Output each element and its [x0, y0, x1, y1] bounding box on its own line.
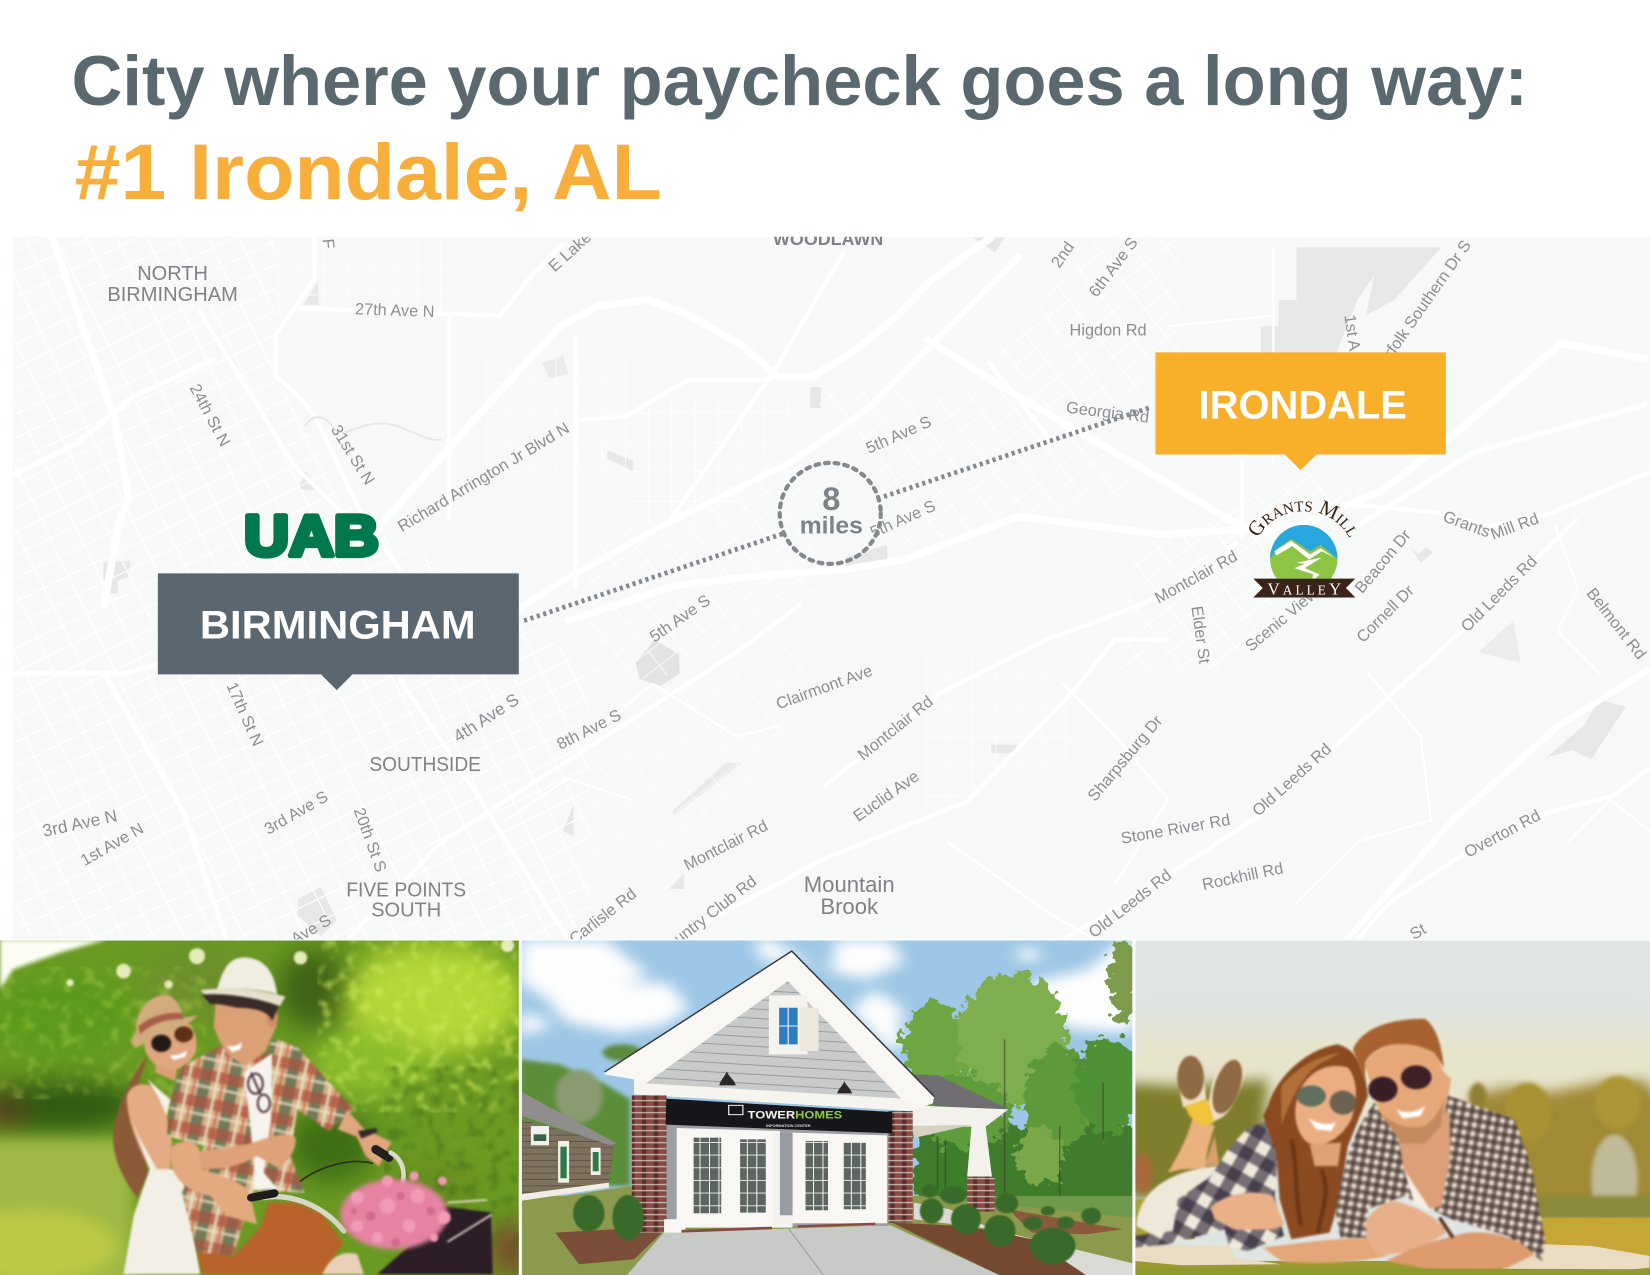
map: street labels: Overton Rd	[1461, 807, 1543, 862]
blanket	[1135, 1244, 1650, 1270]
woman	[113, 995, 204, 1274]
awning with sign	[666, 1099, 892, 1133]
map: street labels: 5th Ave S	[863, 413, 934, 458]
map: street labels: Old Leeds Rd	[1249, 740, 1335, 820]
map: parks and grey land patches	[103, 238, 1626, 936]
photo: Tower Homes information center	[520, 939, 1150, 1275]
woman	[1135, 1044, 1368, 1251]
map: street labels: Grants	[1440, 508, 1493, 541]
attic window	[769, 995, 819, 1054]
map: street labels: 5th Ave S	[868, 497, 938, 542]
panel: street map	[13, 228, 1650, 961]
title: ranking: #1 Irondale, AL	[75, 128, 662, 216]
map label: North Birmingham: NORTH	[137, 263, 208, 285]
map: road network	[13, 237, 1650, 939]
map: street labels: Country Club Rd	[654, 872, 760, 961]
map: street labels: 6th Ave S	[1085, 234, 1142, 301]
map: street labels: 31st St N	[327, 422, 378, 488]
facade and french doors	[664, 1124, 888, 1233]
map: street labels: Clairmont Ave	[774, 662, 875, 713]
map label: Southside: SOUTHSIDE	[369, 754, 481, 776]
grass	[1128, 1199, 1650, 1275]
grass	[0, 1139, 134, 1275]
porch	[912, 1074, 1009, 1212]
map: street labels: Rockhill Rd	[1201, 859, 1285, 894]
map: street labels: 1st Ave N	[78, 819, 147, 870]
map: street labels: Euclid Ave	[850, 767, 923, 826]
right trees	[902, 939, 1150, 1206]
map label: Mountain Brook: Brook	[820, 894, 879, 919]
map: street labels: 20th St S	[350, 805, 390, 875]
sky	[1118, 1026, 1650, 1126]
map: street labels: 24th St N	[186, 381, 234, 450]
map label: Five Points South: FIVE POINTS	[346, 879, 466, 901]
map: street labels: WOODLAWN	[773, 229, 883, 249]
wall lamps	[719, 1071, 736, 1085]
map: street labels: Belmont Rd	[1583, 585, 1649, 663]
map label: Five Points South: SOUTH	[371, 899, 441, 921]
map: street labels: Higdon Rd	[1070, 322, 1147, 340]
map: street labels: Montclair Rd	[681, 817, 771, 874]
distance badge: 8 miles: miles	[800, 512, 863, 539]
left forest	[520, 1044, 642, 1186]
legs and shoes	[1168, 1056, 1248, 1173]
map: street labels: 3rd Ave S	[261, 788, 331, 838]
logo: Grants Mill Valley: V ALLEY	[1267, 579, 1341, 598]
map: street labels: Carlisle Rd	[566, 885, 640, 948]
map: street labels: Old Leeds Rd	[1085, 866, 1175, 942]
map label: Mountain Brook: Mountain	[804, 872, 895, 897]
distance badge: 8 miles: 8	[822, 480, 840, 517]
title: headline: City where your paycheck goes a long way:	[72, 41, 1528, 120]
bright foliage speckles	[317, 939, 521, 1113]
map pin: Irondale: IRONDALE	[1199, 384, 1407, 428]
map: street labels: Sharpsburg Dr	[1084, 712, 1167, 805]
foliage background	[0, 943, 534, 1275]
map: street labels: 8th Ave S	[554, 706, 624, 754]
side building	[520, 1091, 616, 1201]
bicycle	[251, 1149, 404, 1231]
map: street labels: 27th Ave N	[355, 300, 435, 321]
map pin: Birmingham: BIRMINGHAM	[200, 604, 476, 648]
map: street labels: St	[1407, 920, 1430, 944]
map: street labels: Richard Arrington Jr Blvd N	[395, 419, 572, 536]
map label: Five Points South	[348, 882, 466, 916]
dotted route: 8 miles to Irondale	[884, 407, 1151, 497]
basket	[377, 1200, 493, 1274]
awning with sign: INFORMATION CENTER	[766, 1123, 811, 1128]
awning with sign: TOWERHOMES	[748, 1109, 842, 1121]
man shirt and body	[167, 958, 391, 1274]
map: street labels: Montclair Rd	[1152, 547, 1241, 607]
map: street labels: Cornell Dr	[1353, 581, 1418, 646]
map: street labels: 17th St N	[222, 680, 267, 749]
man	[1263, 1019, 1545, 1274]
map: street labels: 5th Ave S	[646, 591, 714, 646]
sky and bokeh	[0, 939, 514, 989]
map: street labels: Mill Rd	[1488, 510, 1541, 544]
logo: Grants Mill Valley: Grants Mill	[1249, 500, 1356, 538]
map: street labels: Norfolk Southern Dr S	[1369, 237, 1475, 378]
map: street labels: E Lake	[545, 228, 595, 276]
map pin: Irondale	[1155, 352, 1446, 470]
clouds	[520, 939, 1135, 1049]
distance badge: 8 miles	[780, 463, 881, 564]
map: street labels: 2nd	[1048, 239, 1078, 271]
map: street labels: Montclair Rd	[854, 693, 937, 764]
map: street labels: Scenic View	[1242, 585, 1321, 655]
map: street labels: 3rd Ave N	[41, 805, 119, 841]
logo: UAB: UAB	[244, 504, 379, 568]
photo: couple on a bicycle	[0, 939, 534, 1275]
map: street labels: 1st A	[1340, 314, 1363, 352]
landscaping bushes	[573, 1184, 1101, 1264]
dotted route: Birmingham to 8 miles	[524, 533, 784, 621]
photo: couple lying on grass	[1118, 939, 1650, 1275]
ground	[520, 1186, 1150, 1275]
map label: North Birmingham	[109, 266, 236, 301]
flowers	[341, 1171, 451, 1249]
brick columns	[632, 1095, 666, 1233]
map: street labels: 4th Ave S	[450, 689, 523, 746]
background trees	[1125, 1079, 1650, 1216]
logo: Grants Mill Valley	[1249, 500, 1356, 598]
map: street labels: Stone River Rd	[1120, 811, 1232, 848]
house gable	[605, 951, 934, 1111]
map: street labels: Georgia Rd	[1065, 399, 1150, 427]
map label: North Birmingham: BIRMINGHAM	[107, 284, 238, 306]
foreground grass	[1135, 1268, 1650, 1275]
map: street labels: Beacon Dr	[1351, 526, 1415, 597]
map: street labels: F	[319, 238, 337, 249]
map label: Mountain Brook	[806, 876, 894, 914]
map: street labels: Ave S	[288, 911, 334, 948]
map: street labels: Old Leeds Rd	[1458, 552, 1541, 636]
map: street labels	[41, 228, 1649, 961]
map: street labels: Elder St	[1187, 605, 1213, 665]
map pin: Birmingham	[158, 573, 519, 690]
